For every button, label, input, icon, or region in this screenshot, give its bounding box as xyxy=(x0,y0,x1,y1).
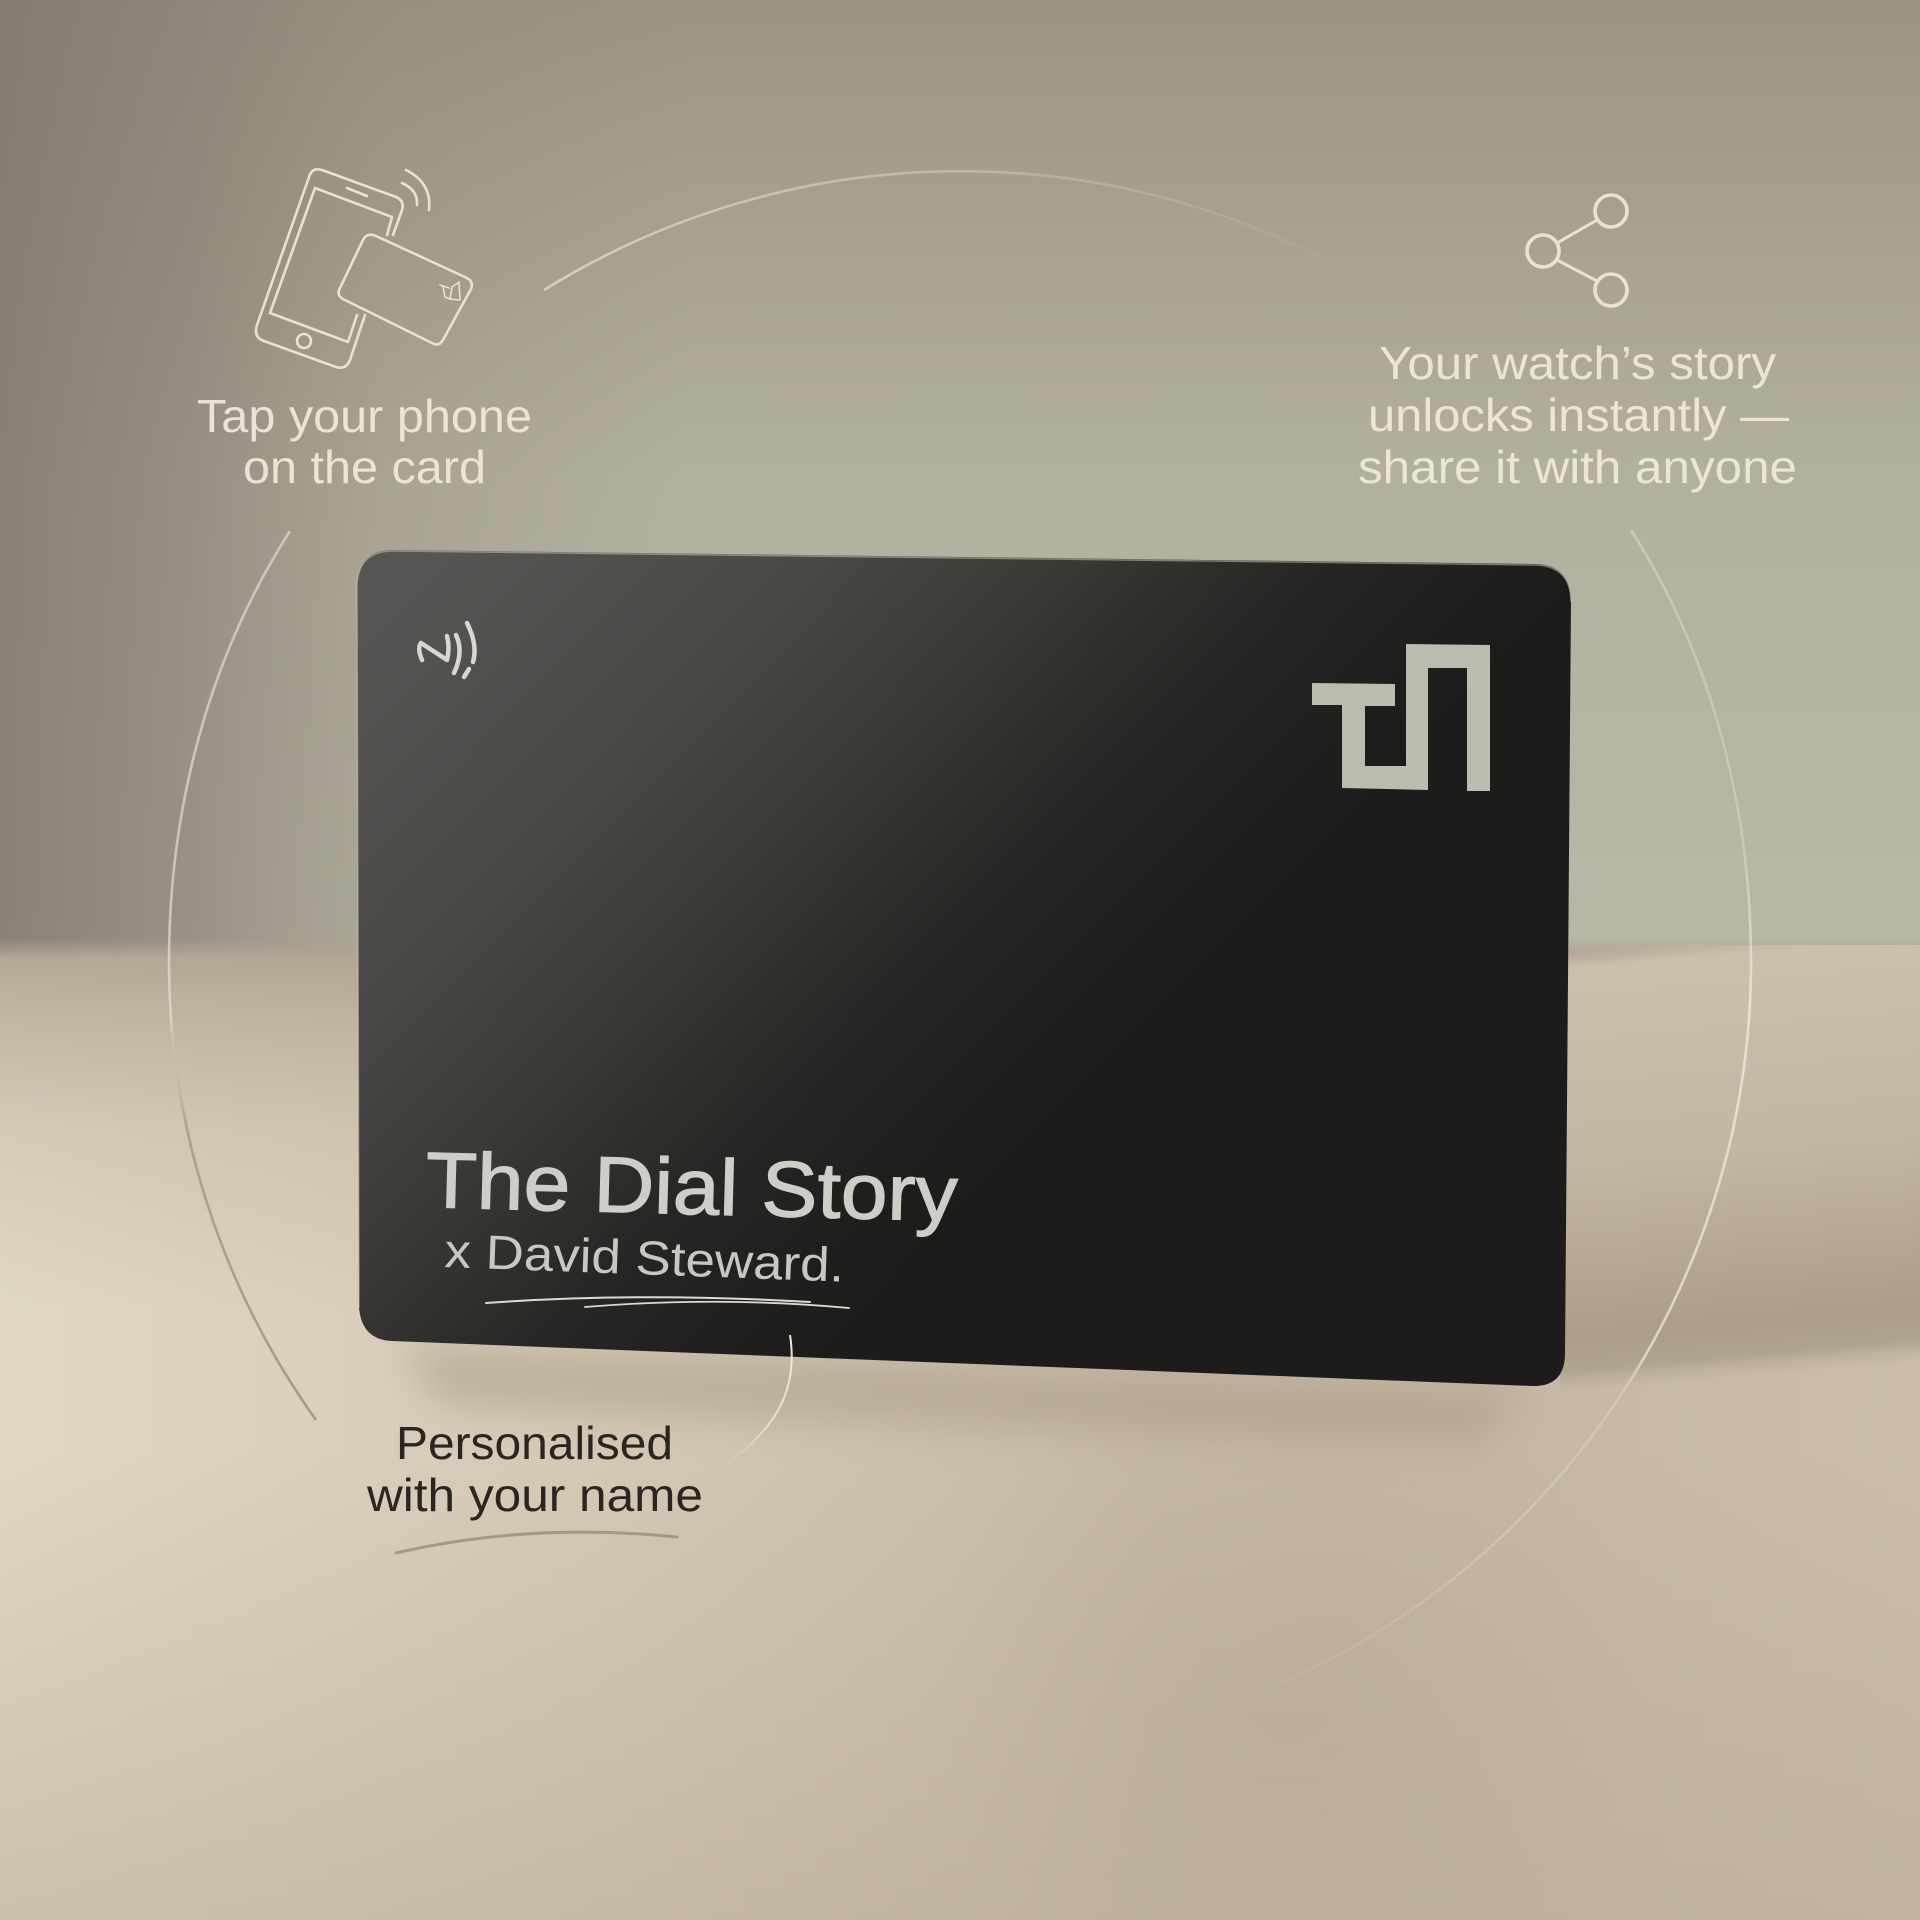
card body xyxy=(357,550,1571,1386)
arc: right xyxy=(1200,530,1751,1714)
card title: The Dial Story xyxy=(425,1135,959,1238)
icon: contactless symbol xyxy=(419,623,475,677)
caption: watch story: Your watch’s story xyxy=(1379,337,1776,389)
caption: tap your phone: Tap your phone xyxy=(197,390,532,442)
icon: phone tapping card xyxy=(256,169,472,368)
arc: left xyxy=(169,531,316,1420)
caption: tap your phone: on the card xyxy=(243,441,486,493)
background: wall xyxy=(0,0,1920,960)
caption: watch story: share it with anyone xyxy=(1358,441,1797,493)
card shadow on table xyxy=(400,1340,1650,1920)
caption: personalised xyxy=(366,1417,703,1521)
card subtitle: x David Steward. xyxy=(444,1225,845,1293)
signature underline xyxy=(486,1297,849,1308)
logo on card xyxy=(1312,644,1490,791)
caption: watch story xyxy=(1358,337,1797,493)
caption: personalised: Personalised xyxy=(396,1417,673,1469)
icon: share xyxy=(1527,195,1627,306)
arc: top xyxy=(544,171,1368,290)
caption: watch story: unlocks instantly — xyxy=(1368,389,1789,441)
caption underline xyxy=(396,1532,677,1553)
black NFC card xyxy=(357,550,1571,1386)
card rim highlight xyxy=(357,551,1571,1308)
background: table surface xyxy=(0,930,1920,1920)
caption: personalised: with your name xyxy=(366,1469,703,1521)
table behind card on the right xyxy=(1560,945,1920,1390)
connector curve xyxy=(722,1335,792,1466)
caption: tap your phone xyxy=(197,390,532,493)
